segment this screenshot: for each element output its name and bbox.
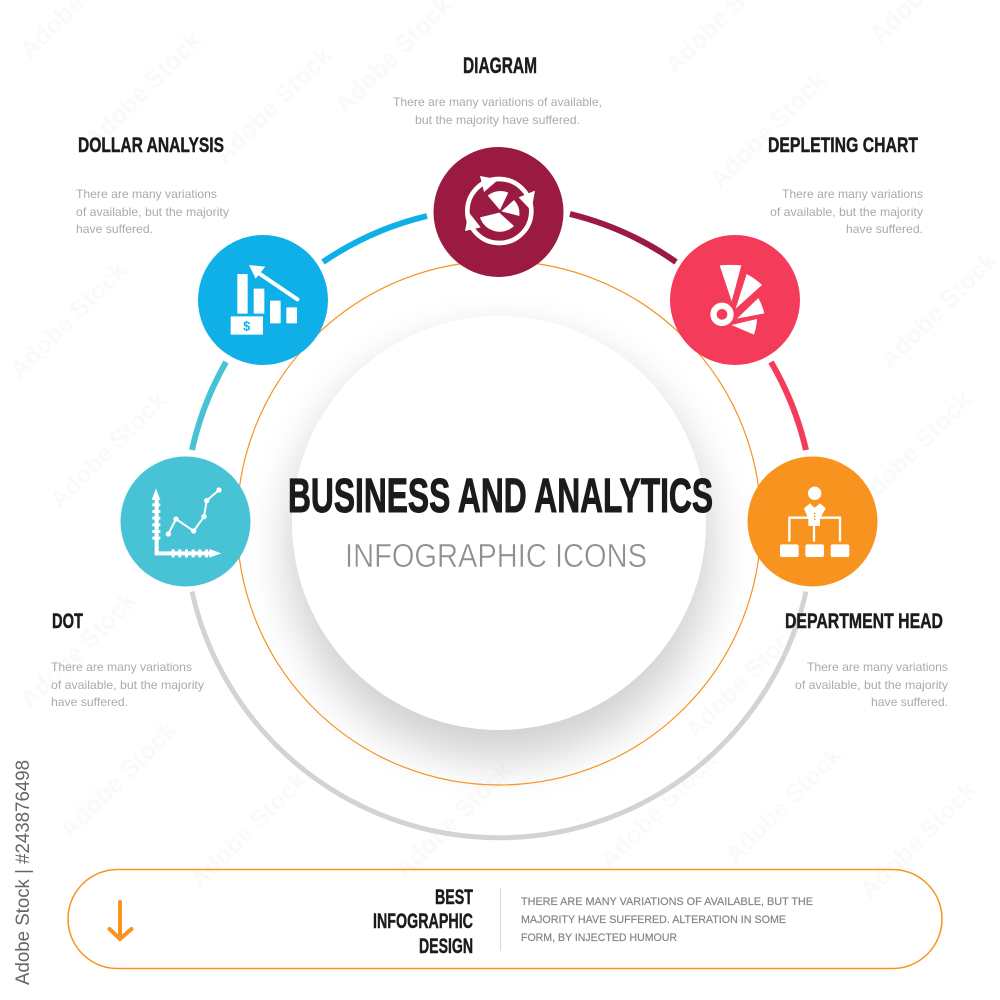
text: Adobe Stock	[14, 586, 142, 714]
label: dot: DOT	[52, 610, 83, 633]
banner text: FORM, BY INJECTED HUMOUR	[521, 932, 677, 944]
label: dot	[51, 610, 204, 709]
icon: depleting wedges	[713, 265, 764, 335]
label: department head: of available, but the majority	[795, 678, 948, 692]
banner text	[521, 896, 813, 944]
label: diagram: DIAGRAM	[463, 53, 537, 78]
label: depleting chart: have suffered.	[846, 222, 923, 236]
banner heading: DESIGN	[419, 935, 473, 958]
label: dot: of available, but the majority	[51, 678, 204, 692]
thin orange circle	[237, 261, 761, 785]
label: depleting chart: DEPLETING CHART	[768, 134, 918, 157]
label: diagram: There are many variations of available,	[393, 95, 602, 109]
label: dot: have suffered.	[51, 695, 128, 709]
subtitle: INFOGRAPHIC ICONS	[345, 537, 647, 574]
banner heading	[373, 886, 473, 958]
icon: down arrow	[110, 902, 132, 939]
label: diagram: but the majority have suffered.	[415, 113, 580, 127]
node: depleting chart	[670, 235, 800, 365]
label: dot: There are many variations	[51, 660, 192, 674]
node: dollar analysis	[198, 235, 328, 365]
icon: department hierarchy	[780, 487, 849, 557]
label: dollar analysis: There are many variations	[76, 187, 217, 201]
text: Adobe Stock	[4, 256, 132, 384]
icon: dot line chart	[152, 487, 222, 558]
label: department head	[785, 610, 948, 709]
segmented outer ring	[192, 214, 806, 838]
text: Adobe Stock	[679, 616, 807, 744]
label: diagram	[393, 53, 602, 127]
label: dollar analysis: have suffered.	[76, 222, 153, 236]
banner text: MAJORITY HAVE SUFFERED. ALTERATION IN SOME	[521, 914, 786, 926]
label: depleting chart: There are many variations	[782, 187, 923, 201]
text: Adobe Stock	[594, 746, 722, 874]
text: Adobe Stock	[54, 716, 182, 844]
text: Adobe Stock	[874, 246, 1000, 374]
text: Adobe Stock	[184, 766, 312, 894]
label: depleting chart	[768, 134, 923, 236]
center disc with soft shadow	[287, 316, 713, 760]
icon: falling bars with dollar: $	[243, 319, 250, 333]
label: department head: There are many variations	[807, 660, 948, 674]
text: Adobe Stock	[79, 26, 207, 154]
bottom banner	[68, 870, 942, 968]
stock id side text: Adobe Stock | #243876498	[13, 760, 34, 985]
text: Adobe Stock	[719, 741, 847, 869]
label: department head: have suffered.	[871, 695, 948, 709]
banner heading: BEST	[435, 886, 473, 909]
text: Adobe Stock	[44, 386, 172, 514]
text: Adobe Stock	[854, 776, 982, 904]
label: dollar analysis	[76, 134, 229, 236]
text: Adobe Stock	[704, 66, 832, 194]
node: dot	[120, 456, 250, 586]
label: department head: DEPARTMENT HEAD	[785, 610, 943, 633]
node: diagram	[434, 147, 564, 277]
label: dollar analysis: of available, but the majority	[76, 205, 229, 219]
banner text: THERE ARE MANY VARIATIONS OF AVAILABLE, BUT THE	[521, 896, 813, 908]
text: Adobe Stock	[389, 756, 517, 884]
label: dollar analysis: DOLLAR ANALYSIS	[78, 134, 224, 157]
icon: circular arrows with pie	[465, 176, 535, 243]
banner heading: INFOGRAPHIC	[373, 910, 473, 933]
text: Adobe Stock	[209, 41, 337, 169]
main title: BUSINESS AND ANALYTICS	[288, 470, 713, 523]
node: department head	[748, 456, 878, 586]
text: Adobe Stock	[849, 386, 977, 514]
label: depleting chart: of available, but the majority	[770, 205, 923, 219]
